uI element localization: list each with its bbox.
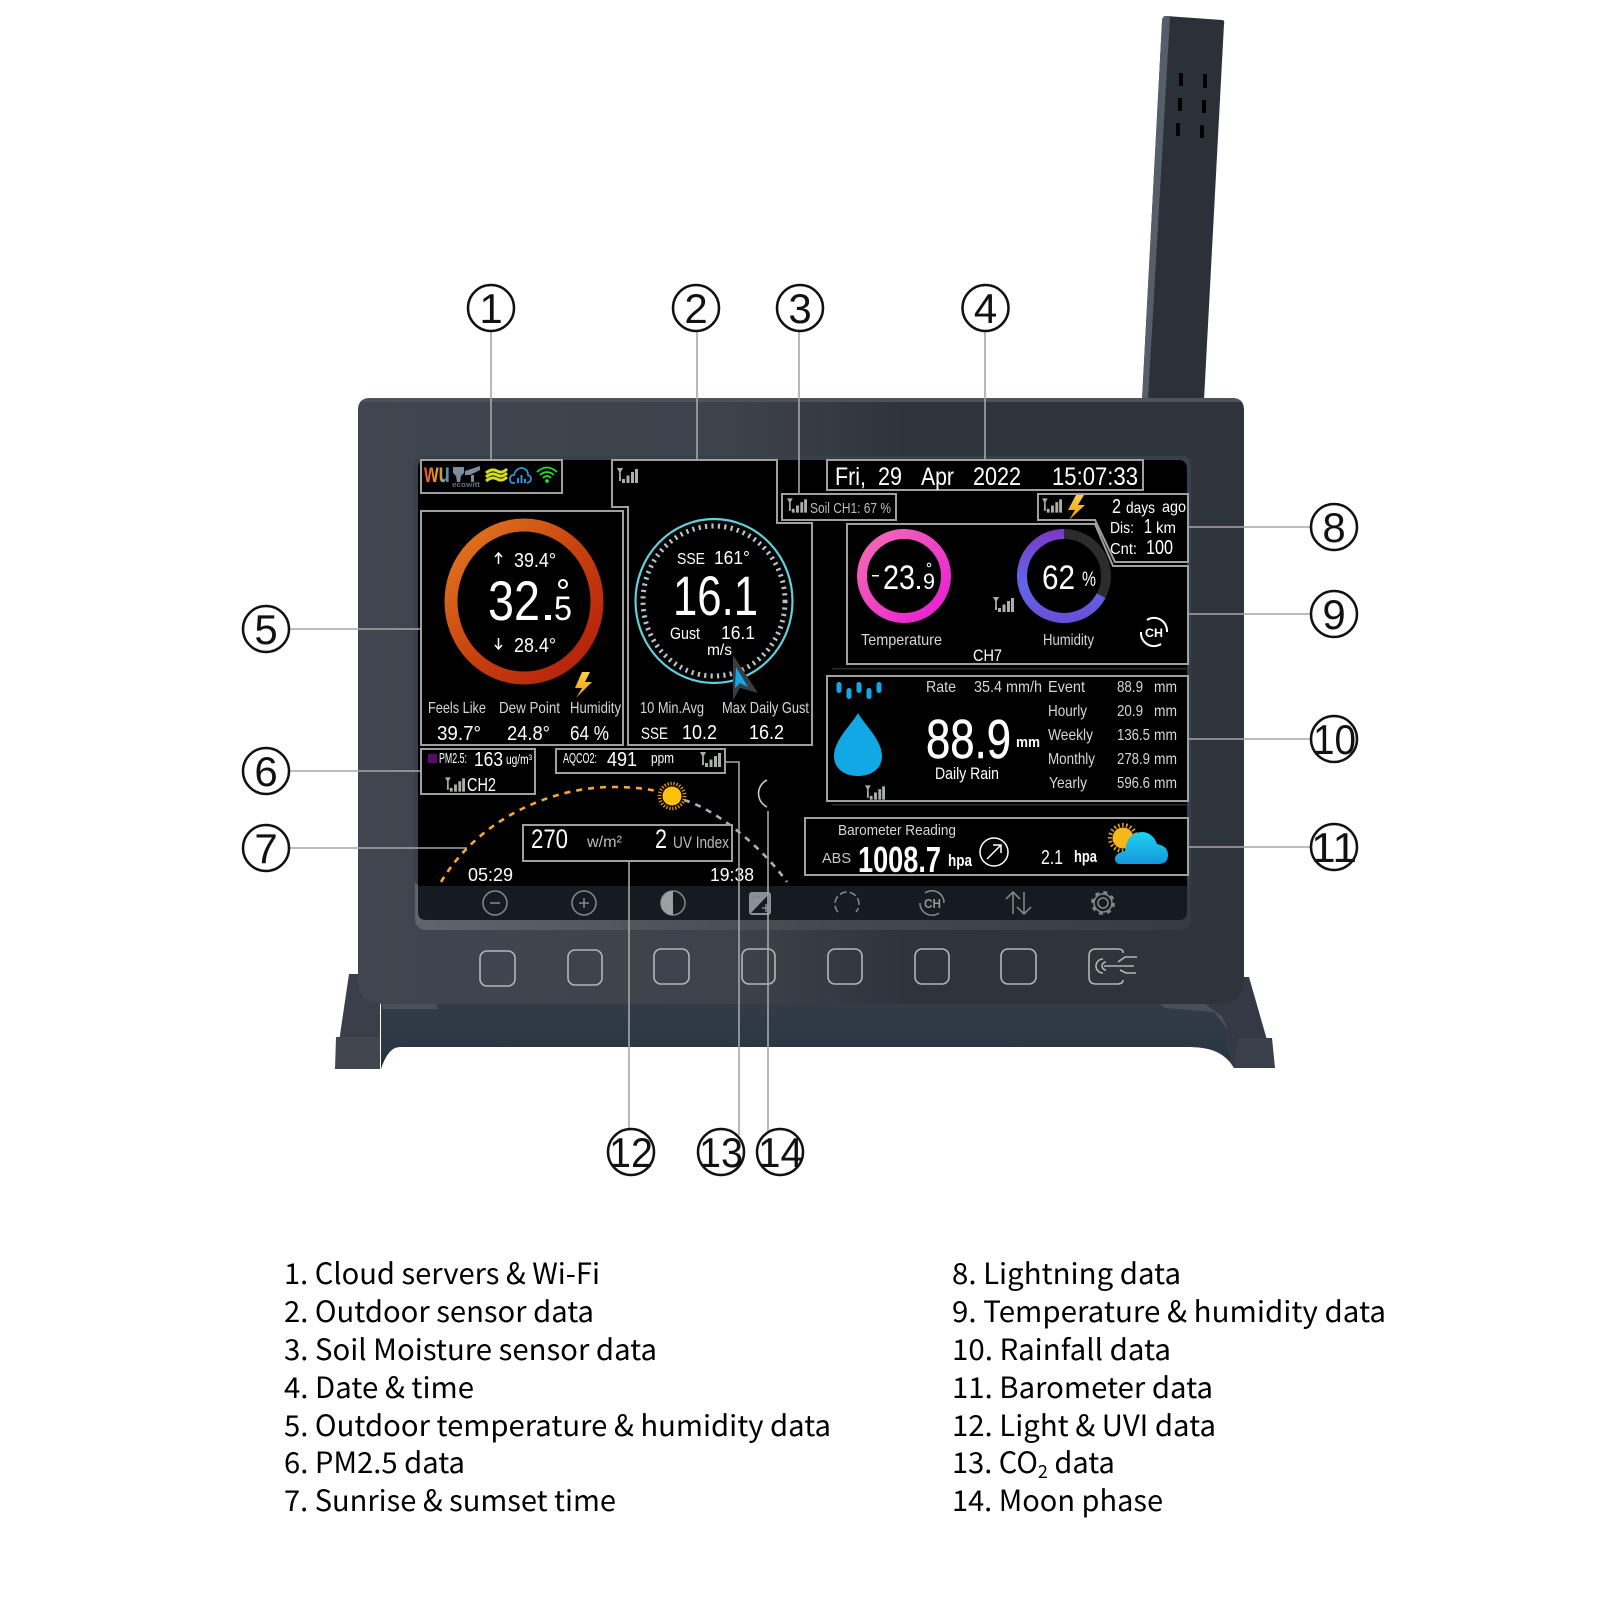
callout 3: 3 — [788, 285, 812, 332]
callout 8: 8 — [1322, 504, 1346, 551]
icon: lightning — [575, 672, 592, 698]
panel: CO2: ppm — [651, 750, 674, 767]
panel: barometer: 1008.7 — [858, 839, 941, 880]
legend: right column: 12. Light & UVI data — [952, 1403, 1216, 1445]
legend: right column: 14. Moon phase — [952, 1478, 1163, 1520]
panel: outdoor temperature and humidity: Dew Point — [499, 700, 560, 717]
legend: right column — [952, 1251, 1386, 1520]
panel: lightning data: 100 — [1146, 537, 1173, 559]
icon: weathercloud waves — [486, 469, 507, 481]
panel: rainfall: 596.6 — [1117, 775, 1150, 792]
panel: soil moisture — [782, 494, 896, 520]
panel: lightning data: km — [1156, 520, 1176, 537]
wind gauge: 16.1 — [721, 623, 755, 643]
icon: rain drops — [836, 682, 882, 699]
humidity value: 62 — [1042, 559, 1075, 597]
wind gauge: m/s — [707, 642, 732, 659]
icon: exposure — [749, 892, 771, 915]
temperature ring — [451, 525, 597, 678]
temperature value: 23 — [883, 559, 915, 597]
high temperature: 39.4° — [514, 550, 556, 572]
legend: left column: 5. Outdoor temperature & humidity data — [284, 1403, 831, 1445]
panel: lightning data: Dis: — [1110, 520, 1134, 537]
panel: outdoor temperature and humidity: 24.8° — [507, 723, 550, 745]
panel: barometer: 2.1 — [1041, 847, 1063, 869]
panel: cloud servers and wi-fi — [421, 457, 562, 493]
screen — [418, 460, 1187, 920]
icon: gauge — [835, 892, 859, 912]
panel: rainfall: 88.9 — [926, 708, 1011, 770]
callout 6: 6 — [254, 748, 278, 795]
icon: plus — [572, 891, 596, 915]
panel: temperature and humidity: Humidity — [1043, 632, 1094, 649]
callout 4 — [962, 285, 1008, 332]
icon: sun behind cloud — [1110, 825, 1168, 864]
panel: light and UV: w/m² — [586, 834, 623, 851]
panel: PM2.5 — [421, 749, 535, 795]
panel: outdoor temperature and humidity: Feels Like — [428, 700, 486, 717]
panel: outdoor temperature and humidity: 64 % — [570, 723, 609, 745]
panel: barometer: Barometer Reading — [838, 822, 956, 839]
panel: outdoor sensor data: 16.2 — [749, 722, 784, 744]
panel: rainfall: 278.9 — [1117, 751, 1150, 768]
sunrise time: 05:29 — [468, 865, 513, 885]
sunset time: 19:38 — [710, 865, 754, 885]
icon: sun — [660, 784, 684, 808]
callout 9 — [1311, 591, 1357, 638]
legend: left column: 3. Soil Moisture sensor data — [284, 1327, 657, 1369]
panel: PM2.5: ug/m³ — [506, 751, 532, 767]
icon: minus — [483, 891, 507, 915]
panel: rainfall: mm — [1154, 703, 1177, 720]
panel: rainfall — [827, 676, 1188, 801]
icon: big water drop — [834, 713, 882, 776]
icon: up and down arrows — [1006, 892, 1031, 914]
icon: signal — [617, 468, 638, 483]
legend: left column: 6. PM2.5 data — [284, 1440, 465, 1482]
icon: channel — [920, 891, 944, 915]
panel: lightning data: Cnt: — [1110, 541, 1137, 558]
current temperature: 32 — [488, 569, 540, 632]
panel: barometer: ABS — [822, 850, 851, 867]
panel: rainfall: mm — [1016, 734, 1040, 751]
icon: channel: CH — [924, 896, 941, 911]
panel: barometer: hpa — [948, 851, 972, 870]
panel: date and time: Apr — [921, 463, 954, 491]
callout 7: 7 — [254, 825, 278, 872]
callout 6 — [243, 748, 289, 795]
callout 12: 12 — [609, 1129, 653, 1176]
legend: left column — [284, 1251, 831, 1520]
icon: channel cycle — [1141, 618, 1167, 646]
callout 3 — [777, 285, 823, 332]
humidity value: % — [1082, 568, 1096, 591]
legend: right column: data — [1048, 1440, 1115, 1482]
panel: rainfall: Rate — [926, 679, 956, 696]
panel: outdoor sensor data: SSE — [641, 724, 668, 743]
callout 5: 5 — [254, 606, 278, 653]
panel: outdoor sensor data — [612, 460, 812, 745]
toolbar icons — [483, 891, 1114, 915]
panel: rainfall: mm — [1154, 679, 1177, 696]
callout 11: 11 — [1311, 824, 1357, 871]
panel: rainfall: Yearly — [1049, 775, 1087, 792]
icon: cloud service — [510, 468, 531, 483]
panel: PM2.5: 163 — [474, 749, 503, 771]
legend: right column: 10. Rainfall data — [952, 1327, 1171, 1369]
panel: soil moisture: Soil CH1: 67 % — [810, 500, 891, 517]
panel: temperature and humidity: CH7 — [973, 646, 1002, 665]
panel: rainfall: mm — [1154, 775, 1177, 792]
panel: date and time: 29 — [878, 463, 902, 491]
screen recess lip — [414, 456, 1191, 930]
icon: settings gear — [1092, 892, 1114, 914]
legend: right column: 8. Lightning data — [952, 1251, 1181, 1293]
wind gauge — [636, 519, 792, 683]
callout 2 — [673, 285, 719, 332]
temperature ring — [862, 534, 946, 618]
panel: temperature and humidity — [847, 524, 1188, 665]
wind gauge: SSE — [677, 551, 705, 568]
panel: rainfall: mm — [1154, 751, 1177, 768]
panel: temperature and humidity: Temperature — [861, 632, 942, 649]
stand base — [335, 974, 1275, 1069]
panel: CO2: 491 — [607, 749, 637, 771]
callout 13: 13 — [699, 1129, 743, 1176]
humidity ring — [1022, 534, 1106, 618]
legend: right column: 9. Temperature & humidity data — [952, 1289, 1386, 1331]
callout 1 — [468, 285, 514, 332]
icon: ecowitt — [452, 466, 481, 489]
callout 2: 2 — [684, 285, 708, 332]
panel: CO2: AQCO2: — [563, 750, 597, 767]
legend: right column: 13. CO — [952, 1440, 1038, 1482]
legend: right column: 11. Barometer data — [952, 1365, 1213, 1407]
panel: lightning data: 1 — [1144, 516, 1152, 538]
panel: date and time: 2022 — [973, 463, 1021, 491]
panel: outdoor temperature and humidity: Humidity — [570, 700, 621, 717]
panel: date and time: Fri, — [835, 463, 866, 491]
panel: lightning data: 2 — [1112, 496, 1121, 518]
callout 1: 1 — [479, 285, 503, 332]
icon: moon — [759, 780, 767, 807]
panel: outdoor temperature and humidity: 39.7° — [437, 723, 481, 745]
panel: outdoor temperature and humidity — [421, 511, 623, 745]
sun path arc — [441, 787, 787, 882]
panel: light and UV: 2 — [655, 824, 667, 854]
panel: barometer: hpa — [1074, 847, 1097, 866]
panel: rainfall: Monthly — [1048, 751, 1095, 768]
panel: light and UV — [523, 824, 732, 861]
panel: date and time — [827, 460, 1143, 491]
panel: rainfall: mm — [1154, 727, 1177, 744]
panel: rainfall: Hourly — [1048, 703, 1087, 720]
legend: left column: 2. Outdoor sensor data — [284, 1289, 594, 1331]
panel: rainfall: 35.4 mm/h — [974, 679, 1042, 696]
icon: channel cycle: CH — [1145, 626, 1163, 640]
wind gauge: 161° — [714, 548, 750, 568]
panel: date and time: 15:07:33 — [1052, 463, 1138, 491]
low temperature — [495, 635, 556, 657]
temperature value: 9 — [923, 569, 935, 594]
icon: ecowitt: ecowitt — [452, 482, 481, 489]
callout 14: 14 — [758, 1129, 803, 1176]
panel: rainfall: Daily Rain — [935, 764, 999, 783]
callout 7 — [243, 825, 289, 872]
panel: lightning data: days — [1126, 500, 1155, 517]
panel: lightning data — [1038, 494, 1188, 562]
low temperature: 28.4° — [514, 635, 556, 657]
panel: rainfall: Event — [1048, 679, 1085, 696]
temperature value — [872, 559, 935, 597]
panel: rainfall: 136.5 — [1117, 727, 1150, 744]
wind direction arrow — [733, 655, 758, 700]
antenna — [1142, 16, 1224, 400]
panel: lightning data: ago — [1162, 499, 1186, 516]
panel: outdoor sensor data: 10.2 — [682, 722, 717, 744]
current temperature: 5 — [554, 590, 572, 628]
wind gauge: Gust — [670, 624, 700, 643]
panel: rainfall: Weekly — [1048, 727, 1093, 744]
callout 9: 9 — [1322, 591, 1346, 638]
legend: right column: 2 — [1038, 1458, 1048, 1484]
callout 4: 4 — [974, 285, 997, 332]
legend: left column: 1. Cloud servers & Wi-Fi — [284, 1251, 600, 1293]
panel: rainfall: 20.9 — [1117, 703, 1143, 720]
callout 8 — [1311, 504, 1357, 551]
panel: outdoor sensor data: Max Daily Gust — [722, 700, 809, 717]
legend: left column: 4. Date & time — [284, 1365, 474, 1407]
callout 5 — [243, 606, 289, 653]
icon: trend arrow — [980, 838, 1008, 866]
icon: contrast — [661, 891, 685, 915]
panel: rainfall: 88.9 — [1117, 679, 1143, 696]
device body — [358, 398, 1244, 1004]
high temperature — [495, 550, 556, 572]
callout 10: 10 — [1313, 716, 1356, 763]
panel: light and UV: 270 — [531, 824, 568, 854]
hardware buttons — [480, 949, 1137, 986]
legend: left column: 7. Sunrise & sumset time — [284, 1478, 616, 1520]
panel: PM2.5: PM2.5: — [439, 750, 467, 767]
touch sensor button — [1089, 949, 1137, 984]
panel: outdoor sensor data: 10 Min.Avg — [640, 700, 704, 717]
panel: barometer — [805, 818, 1188, 880]
icon: lightning bolt — [1068, 495, 1085, 520]
icon: wunderground: wu — [423, 457, 450, 488]
panel: CO2 — [556, 749, 725, 773]
icon: wi-fi — [537, 468, 557, 482]
callout numbers — [243, 285, 1357, 1176]
wind gauge: 16.1 — [673, 564, 758, 627]
panel: PM2.5: CH2 — [467, 775, 496, 795]
panel: light and UV: UV Index — [673, 833, 729, 852]
leader lines — [289, 332, 1311, 1135]
